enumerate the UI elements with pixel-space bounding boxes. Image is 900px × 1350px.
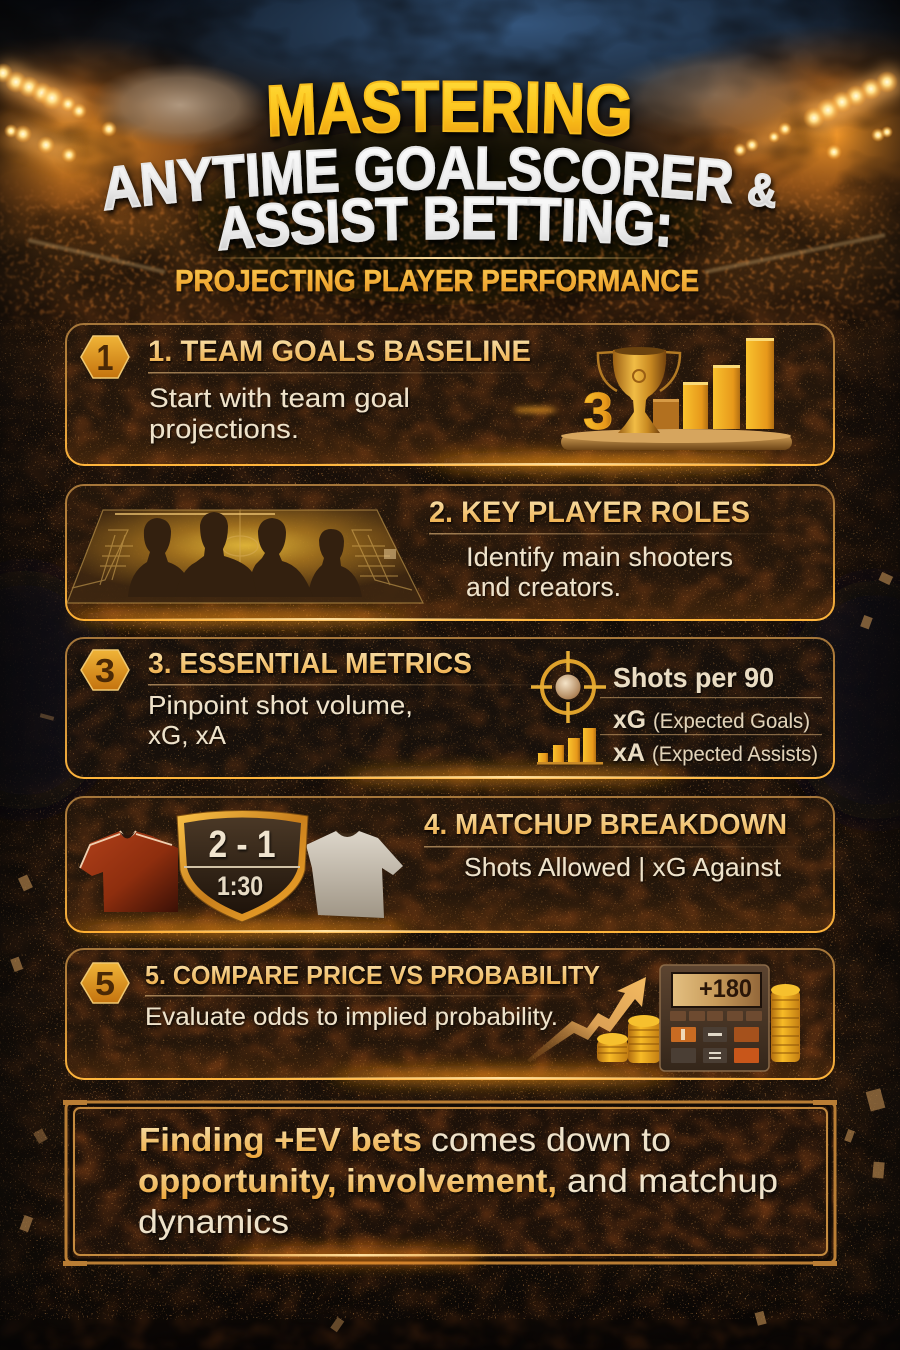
number badge 5 <box>81 963 129 1003</box>
body text 2: and creators. <box>466 572 621 602</box>
metric list: xA <box>613 739 645 767</box>
body text 1: Start with team goal <box>149 383 410 413</box>
metric list: xG <box>613 706 646 734</box>
icon: trophy and bars on platform: 3 <box>583 383 613 441</box>
body text 2 <box>466 542 733 602</box>
pitch with player silhouettes <box>67 510 423 603</box>
icon: target <box>531 651 606 723</box>
subtitle: PROJECTING PLAYER PERFORMANCE <box>175 263 699 298</box>
panel: 3 essential metrics <box>66 638 834 782</box>
number badge 1: 1 <box>96 337 114 378</box>
confetti particles <box>10 572 893 1332</box>
body text 1: projections. <box>149 414 299 444</box>
icon: calculator <box>660 965 769 1071</box>
score shield <box>177 810 308 922</box>
heading 2: 2. KEY PLAYER ROLES <box>429 496 750 529</box>
frame corner ornaments <box>63 1100 837 1266</box>
title line: Anytime Goalscorer: ANYTIME GOALSCORER & <box>103 146 780 218</box>
panel: 2 key player roles <box>66 485 834 624</box>
panel: 1 team goals baseline <box>66 324 834 470</box>
metric list: (Expected Goals) <box>653 710 810 733</box>
metric list <box>600 662 822 767</box>
takeaway text: comes down to <box>431 1121 671 1158</box>
stadium lights: right <box>733 71 900 160</box>
title line: Mastering: MASTERING <box>268 80 634 142</box>
score shield: 2 - 1 <box>208 824 276 866</box>
heading 3: 3. ESSENTIAL METRICS <box>148 648 472 680</box>
number badge 5: 5 <box>95 965 115 1002</box>
number badge 3: 3 <box>95 652 115 689</box>
silhouette players <box>128 512 362 597</box>
takeaway text <box>138 1121 778 1240</box>
title <box>103 80 780 298</box>
number badge 1 <box>81 336 129 378</box>
score shield: 1:30 <box>217 871 263 901</box>
takeaway text: and matchup <box>567 1162 778 1199</box>
panel: takeaway frame <box>63 1100 837 1266</box>
takeaway text: Finding +EV bets <box>139 1121 422 1158</box>
title line: Assist Betting: ASSIST BETTING: <box>218 196 673 256</box>
icon: trophy and bars on platform <box>513 338 792 450</box>
metric list: Shots per 90 <box>613 662 774 693</box>
icon: rising arrow <box>527 977 646 1062</box>
takeaway text: dynamics <box>138 1203 289 1240</box>
icon: white jersey <box>306 831 403 918</box>
heading 1: 1. TEAM GOALS BASELINE <box>148 335 531 368</box>
heading 4: 4. MATCHUP BREAKDOWN <box>424 809 787 841</box>
panel: 4 matchup breakdown <box>66 797 834 936</box>
title divider <box>200 257 675 259</box>
icon: red jersey <box>80 831 178 912</box>
icon: coin stacks <box>597 984 800 1063</box>
panel: 5 compare price vs probability <box>66 949 834 1083</box>
stadium lights: left <box>0 63 117 163</box>
body text 1 <box>149 383 410 444</box>
icon: calculator: +180 <box>699 975 752 1003</box>
body text 3: xG, xA <box>148 720 227 750</box>
metric list: (Expected Assists) <box>652 743 818 766</box>
body text 2: Identify main shooters <box>466 542 733 572</box>
crowd speckle band <box>0 170 900 340</box>
number badge 3 <box>81 650 129 690</box>
takeaway text: opportunity, involvement, <box>138 1162 557 1199</box>
icon: mini bar chart <box>537 728 603 764</box>
body text 4: Shots Allowed | xG Against <box>464 852 782 882</box>
body text 3 <box>148 690 413 750</box>
body text 5: Evaluate odds to implied probability. <box>145 1003 558 1031</box>
heading 5: 5. COMPARE PRICE VS PROBABILITY <box>145 960 600 990</box>
body text 3: Pinpoint shot volume, <box>148 690 413 720</box>
